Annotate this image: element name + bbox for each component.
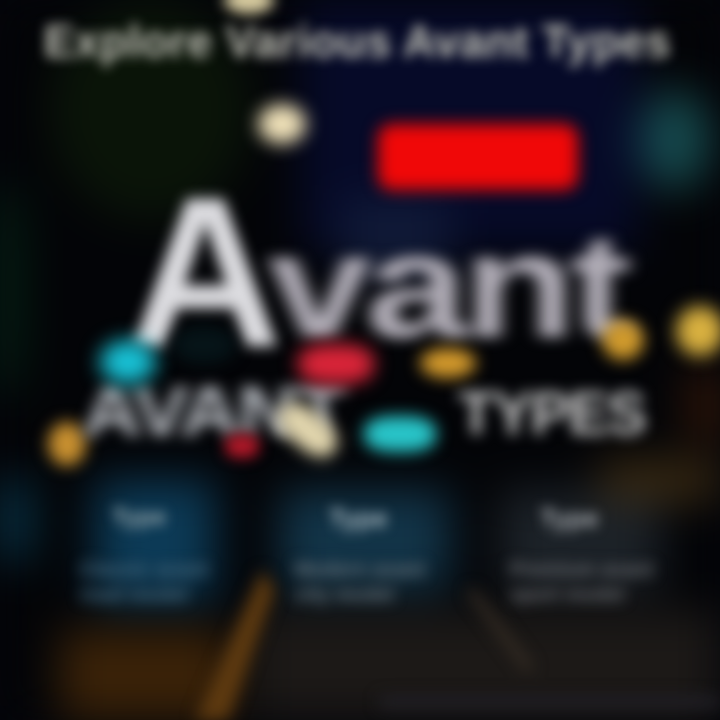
colour accent: amber [420,348,476,378]
column 3 body: Premium avant [510,559,653,581]
column 1 text [76,501,210,608]
column 1 body [76,557,210,608]
logo word: Types right: TYPES [458,380,645,447]
light: upper centre [258,104,306,144]
colour accent: gold right [602,320,644,360]
colour accent: cream diagonal [271,395,345,465]
column 2 body: city model [295,584,394,606]
column 3 body [506,557,658,609]
column 2 text [290,501,428,608]
column 2 body: Modern avant [295,559,425,581]
column 3 heading: Type [540,503,599,533]
logo letters: vant: vant [268,201,626,369]
red sign [378,124,578,190]
column 2 heading: Type [329,503,388,533]
colour accent: dark notch [172,326,236,364]
column 1 heading: Type [112,504,166,531]
column 3 body: sport model [510,584,624,606]
light: top [224,0,274,14]
colour accent: red lower [225,434,259,458]
colour accent: cyan upper [100,340,156,384]
column 3 text [506,502,658,609]
column 2 body [290,556,428,608]
column 1 body: road model [80,584,188,606]
colour accent: red [298,344,374,384]
light: left [48,422,86,466]
column 1 body: Classic avant [80,559,208,581]
light: right [676,306,720,356]
logo word: Types left: AVANT [82,372,343,452]
colour accent: cyan lower [364,416,436,452]
logo group: Avant Types [76,153,656,470]
logo letter: A: A [128,153,283,392]
title: Explore Various Avant Types [44,16,671,67]
